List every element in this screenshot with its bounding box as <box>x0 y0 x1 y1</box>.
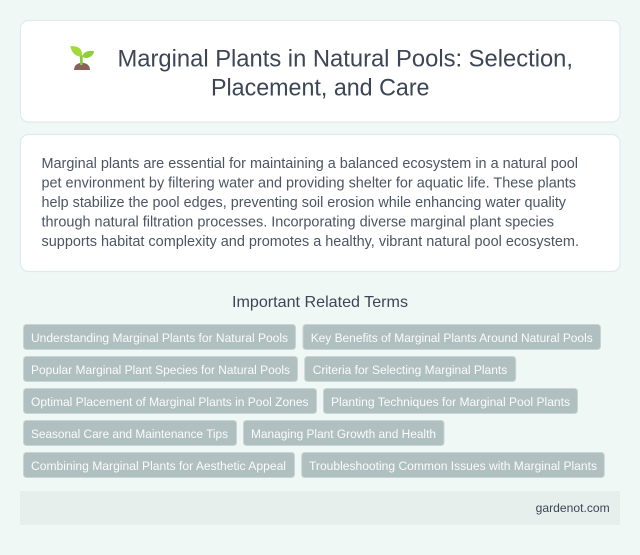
tag: seasonal care: Seasonal Care and Maintenance Tips <box>31 427 228 441</box>
text block: introduction paragraph: through natural filtration processes. Incorporating diverse marginal plant species <box>42 214 554 230</box>
tag: planting techniques: Planting Techniques for Marginal Pool Plants <box>331 395 570 409</box>
tag: seasonal care <box>24 420 236 446</box>
tag: optimal placement <box>24 388 316 414</box>
tag: selection criteria <box>305 356 516 382</box>
title: Marginal Plants in Natural Pools: Selection, <box>118 46 573 72</box>
text block: introduction paragraph: supports habitat complexity and promotes a healthy, vibrant natural pool ecosystem. <box>42 233 579 250</box>
tag: popular species: Popular Marginal Plant Species for Natural Pools <box>31 363 290 377</box>
heading: related terms: Important Related Terms <box>232 294 408 311</box>
tag: key benefits: Key Benefits of Marginal Plants Around Natural Pools <box>311 331 593 345</box>
tag: popular species <box>24 356 298 382</box>
text block: introduction paragraph: pet environment by filtering water and providing shelter for aquatic life. These plants <box>42 174 576 192</box>
tag: managing growth <box>244 420 444 446</box>
panel: title card <box>20 20 620 122</box>
tag: understanding: Understanding Marginal Plants for Natural Pools <box>31 331 288 345</box>
tag: key benefits <box>303 324 600 350</box>
text block: introduction paragraph: Marginal plants are essential for maintaining a balanced ecosystem in a natural pool <box>42 155 578 172</box>
tag: optimal placement: Optimal Placement of Marginal Plants in Pool Zones <box>31 395 308 409</box>
tag: combining plants <box>24 452 294 478</box>
tag: troubleshooting <box>302 452 604 478</box>
text block: introduction paragraph <box>42 155 579 250</box>
footer <box>20 491 620 525</box>
tag: understanding <box>24 324 296 350</box>
tag: planting techniques <box>324 388 578 414</box>
title: Placement, and Care <box>211 74 430 102</box>
tag: managing growth: Managing Plant Growth and Health <box>251 427 436 441</box>
tag: selection criteria: Criteria for Selecting Marginal Plants <box>313 363 507 377</box>
footer: gardenot.com <box>536 501 610 515</box>
panel: introduction <box>20 134 620 272</box>
tag: troubleshooting: Troubleshooting Common Issues with Marginal Plants <box>309 459 597 473</box>
panel: related term tags <box>24 324 604 478</box>
text block: introduction paragraph: help stabilize the pool edges, preventing soil erosion while enhancing water quality <box>42 194 566 211</box>
tag: combining plants: Combining Marginal Plants for Aesthetic Appeal <box>31 459 286 473</box>
title <box>118 46 573 102</box>
icon: sprout <box>70 46 94 70</box>
